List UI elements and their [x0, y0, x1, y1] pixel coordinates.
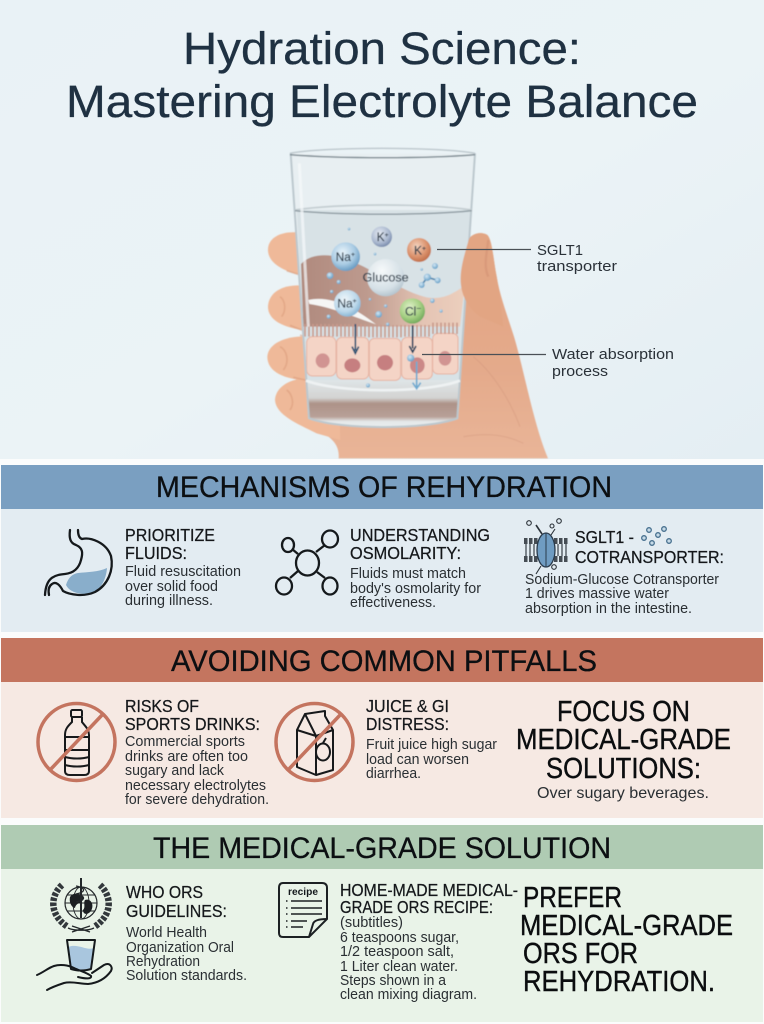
ion: K+ orange: [407, 238, 431, 262]
thumbnail shading: [486, 240, 488, 277]
SGLT1 cotransporter text: Sodium-Glucose Cotransporter: [525, 572, 719, 588]
home-made ORS recipe text: (subtitles): [340, 915, 403, 931]
risks of sports drinks text: drinks are often too: [125, 749, 248, 765]
title: Mastering Electrolyte Balance: [66, 76, 698, 127]
callout: water absorption process: process: [552, 364, 608, 380]
title: [66, 23, 698, 127]
callout: SGLT1 transporter: transporter: [537, 259, 617, 275]
home-made ORS recipe text: HOME-MADE MEDICAL-: [340, 880, 518, 900]
hero background: [0, 0, 764, 459]
fingers: [267, 232, 340, 440]
ion: Na+ upper: Na: [336, 250, 351, 264]
callout: water absorption process: Water absorption: [552, 347, 674, 363]
risks of sports drinks text: for severe dehydration.: [125, 792, 269, 808]
WHO ORS guidelines text: Rehydration: [126, 954, 200, 970]
epithelial cells: [307, 333, 458, 380]
illustration: hand holding glass of water: [267, 148, 548, 458]
ion: K+ upper: K: [377, 230, 385, 244]
callout: focus on medical-grade solutions: SOLUTIONS:: [546, 753, 701, 785]
home-made ORS recipe text: 6 teaspoons sugar,: [340, 930, 459, 946]
title: Hydration Science:: [183, 23, 581, 74]
callout: water absorption process: [422, 347, 674, 380]
ion: K+ upper: +: [385, 232, 389, 239]
risks of sports drinks text: sugary and lack: [125, 763, 225, 779]
ion: Na+ lower: [334, 290, 361, 317]
callout: SGLT1 transporter: SGLT1: [537, 243, 583, 259]
icon: recipe card: recipe: [288, 886, 318, 898]
prioritize fluids text: Fluid resuscitation: [125, 564, 241, 580]
ion: K+ orange: K: [414, 243, 422, 257]
callout: focus on medical-grade solutions: MEDICAL-GRADE: [516, 724, 731, 756]
prioritize fluids text: [125, 525, 241, 609]
water molecule: [419, 274, 441, 288]
section band: solution: [1, 825, 763, 869]
understanding osmolarity text: Fluids must match: [350, 566, 466, 582]
prioritize fluids text: PRIORITIZE: [125, 525, 215, 545]
home-made ORS recipe text: 1 Liter clean water.: [340, 959, 458, 975]
intestinal tissue background: [301, 255, 465, 327]
glass outline and highlights: [290, 148, 475, 427]
ion: K+ orange: +: [422, 245, 426, 252]
molecule: glucose: Glucose: [363, 271, 409, 285]
icon: molecule: [276, 530, 338, 594]
callout: prefer medical-grade ORS: MEDICAL-GRADE: [520, 910, 733, 942]
icon: WHO emblem: [53, 878, 109, 932]
section band: mechanisms: MECHANISMS OF REHYDRATION: [156, 471, 612, 504]
icon: molecule dots: [642, 527, 671, 545]
icon: no juice carton: [276, 704, 353, 780]
risks of sports drinks text: necessary electrolytes: [125, 778, 266, 794]
callout: focus on medical-grade solutions: Over sugary beverages.: [537, 785, 709, 802]
ion: K+ upper: [371, 226, 392, 247]
prioritize fluids text: during illness.: [125, 593, 213, 609]
thumb over glass: [461, 233, 503, 327]
risks of sports drinks text: RISKS OF: [125, 696, 199, 716]
SGLT1 cotransporter text: COTRANSPORTER:: [575, 547, 724, 567]
icon: no sports bottle: [38, 704, 115, 780]
juice and GI distress text: [366, 696, 497, 782]
SGLT1 cotransporter text: 1 drives massive water: [525, 586, 669, 602]
home-made ORS recipe text: clean mixing diagram.: [340, 987, 477, 1003]
prioritize fluids text: over solid food: [125, 579, 218, 595]
understanding osmolarity text: UNDERSTANDING: [350, 525, 490, 545]
juice and GI distress text: JUICE & GI: [366, 696, 449, 716]
panel: the medical-grade solution: [1, 825, 763, 1022]
juice and GI distress text: load can worsen: [366, 752, 469, 768]
callout: focus on medical-grade solutions: [516, 696, 731, 802]
SGLT1 cotransporter text: SGLT1 -: [575, 527, 634, 547]
prioritize fluids text: FLUIDS:: [125, 543, 187, 563]
callout: prefer medical-grade ORS: [520, 882, 733, 998]
hand palm and thumb: [307, 233, 548, 458]
callout: prefer medical-grade ORS: PREFER: [523, 882, 622, 914]
panel: avoiding common pitfalls: [1, 638, 763, 818]
section band: pitfalls: [1, 638, 763, 682]
risks of sports drinks text: SPORTS DRINKS:: [125, 714, 260, 734]
home-made ORS recipe text: 1/2 teaspoon salt,: [340, 944, 454, 960]
arrows through cells: [352, 324, 421, 389]
icon: stomach: [45, 530, 112, 595]
small bubbles: [327, 228, 443, 387]
icon: membrane transporter: [524, 519, 568, 574]
section band: solution: THE MEDICAL-GRADE SOLUTION: [153, 832, 611, 865]
ion: Na+ upper: [331, 242, 360, 271]
palm crease shading: [463, 357, 523, 443]
molecule: glucose: [363, 259, 409, 296]
WHO ORS guidelines text: [126, 882, 247, 984]
ion: Cl-: [400, 298, 425, 324]
section band: mechanisms: [1, 465, 763, 509]
ion: Cl-: Cl: [405, 305, 416, 319]
ion: Cl-: −: [416, 304, 421, 313]
juice and GI distress text: diarrhea.: [366, 766, 421, 782]
finger creases: [280, 232, 308, 410]
risks of sports drinks text: Commercial sports: [125, 734, 245, 750]
microvilli: [305, 323, 457, 337]
WHO ORS guidelines text: GUIDELINES:: [126, 901, 227, 921]
white swoosh: [308, 299, 376, 324]
home-made ORS recipe text: GRADE ORS RECIPE:: [340, 897, 493, 917]
icon: hand holding glass: [37, 940, 112, 990]
risks of sports drinks text: [125, 696, 269, 808]
understanding osmolarity text: [350, 525, 490, 611]
understanding osmolarity text: effectiveness.: [350, 595, 436, 611]
glass body: [291, 153, 475, 427]
callout: focus on medical-grade solutions: FOCUS ON: [557, 696, 690, 728]
callout: SGLT1 transporter: [437, 243, 617, 275]
understanding osmolarity text: OSMOLARITY:: [350, 543, 461, 563]
callout: prefer medical-grade ORS: ORS FOR: [523, 938, 638, 970]
home-made ORS recipe text: Steps shown in a: [340, 973, 447, 989]
WHO ORS guidelines text: Organization Oral: [126, 940, 234, 956]
water: [297, 210, 471, 380]
WHO ORS guidelines text: Solution standards.: [126, 968, 247, 984]
juice and GI distress text: DISTRESS:: [366, 714, 449, 734]
panel: mechanisms of rehydration: [1, 465, 763, 632]
juice and GI distress text: Fruit juice high sugar: [366, 737, 497, 753]
ion: Na+ lower: +: [353, 298, 357, 305]
nuclei: [316, 351, 451, 373]
ion: Na+ upper: +: [351, 251, 355, 258]
SGLT1 cotransporter text: [525, 527, 724, 617]
icon: recipe card: [279, 883, 327, 937]
WHO ORS guidelines text: World Health: [126, 925, 207, 941]
SGLT1 cotransporter text: absorption in the intestine.: [525, 601, 692, 617]
section band: pitfalls: AVOIDING COMMON PITFALLS: [171, 645, 597, 678]
home-made ORS recipe text: [340, 880, 518, 1003]
WHO ORS guidelines text: WHO ORS: [126, 882, 203, 902]
understanding osmolarity text: body's osmolarity for: [350, 581, 481, 597]
ion: Na+ lower: Na: [337, 297, 353, 311]
glass base: [306, 380, 460, 427]
callout: prefer medical-grade ORS: REHYDRATION.: [523, 966, 715, 998]
